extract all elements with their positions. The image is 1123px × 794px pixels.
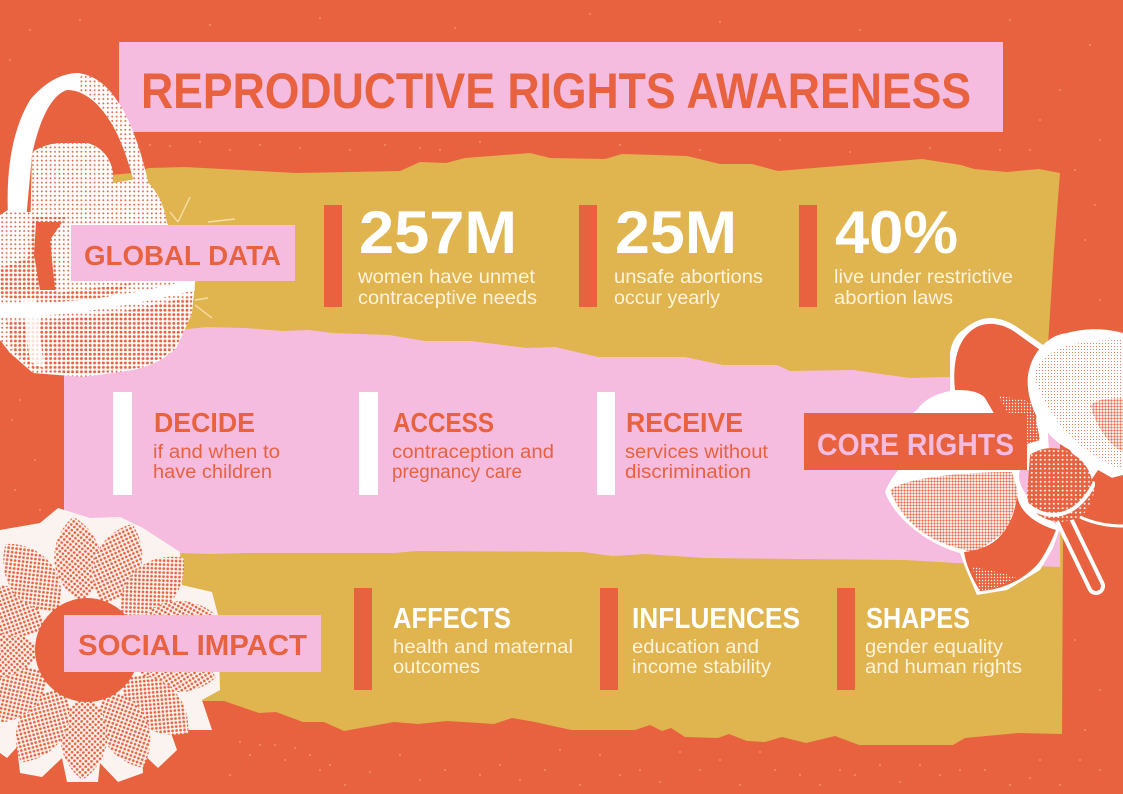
impact: shapes — [837, 588, 1022, 690]
right: decide: have children — [153, 462, 272, 483]
label: global data — [71, 225, 295, 281]
icon: daisy — [0, 508, 221, 782]
stat: 25M: unsafe abortions — [614, 267, 763, 288]
right: decide — [113, 392, 280, 495]
impact: influences: education and — [632, 637, 759, 658]
right: receive: discrimination — [625, 462, 751, 483]
stat: 257M: 257M — [359, 199, 517, 266]
icon: sparkle lines — [170, 197, 235, 318]
stat: 25M: occur yearly — [614, 288, 721, 309]
impact: shapes: and human rights — [865, 657, 1022, 678]
right: receive — [597, 392, 769, 495]
impact: shapes: gender equality — [865, 637, 1004, 658]
title: REPRODUCTIVE RIGHTS AWARENESS — [141, 63, 971, 119]
label: social impact: SOCIAL IMPACT — [78, 630, 307, 662]
impact: influences: INFLUENCES — [632, 603, 800, 635]
impact: affects: outcomes — [393, 657, 480, 678]
panel: social impact band — [180, 530, 1063, 745]
impact: influences — [600, 588, 800, 690]
right: access: contraception and — [392, 442, 554, 463]
right: access: ACCESS — [393, 407, 494, 438]
panel: core rights band — [64, 327, 1060, 567]
stat: 40%: abortion laws — [834, 288, 953, 309]
icon: basket — [0, 73, 235, 377]
right: decide: if and when to — [153, 442, 280, 463]
icon: orchid — [885, 318, 1123, 595]
label: social impact — [64, 615, 321, 672]
panel: global data band — [110, 153, 1060, 400]
stat: 257M — [324, 199, 537, 309]
stat: 40%: live under restrictive — [834, 267, 1013, 288]
impact: influences: income stability — [632, 657, 772, 678]
right: decide: DECIDE — [154, 407, 255, 438]
stat: 257M: contraceptive needs — [358, 288, 537, 309]
impact: shapes: SHAPES — [866, 603, 970, 635]
impact: affects: health and maternal — [393, 637, 573, 658]
stat: 257M: women have unmet — [357, 267, 536, 288]
impact: affects: AFFECTS — [393, 603, 511, 635]
label: core rights — [804, 413, 1027, 470]
label: core rights: CORE RIGHTS — [817, 427, 1014, 462]
right: access — [359, 392, 554, 495]
title banner — [119, 42, 1003, 132]
stat: 25M — [579, 199, 763, 309]
stat: 40%: 40% — [835, 199, 958, 266]
right: receive: services without — [625, 442, 769, 463]
stat: 25M: 25M — [615, 199, 737, 266]
right: access: pregnancy care — [392, 462, 522, 483]
stat: 40% — [799, 199, 1013, 309]
label: global data: GLOBAL DATA — [84, 240, 281, 271]
impact: affects — [354, 588, 573, 690]
right: receive: RECEIVE — [626, 407, 743, 438]
